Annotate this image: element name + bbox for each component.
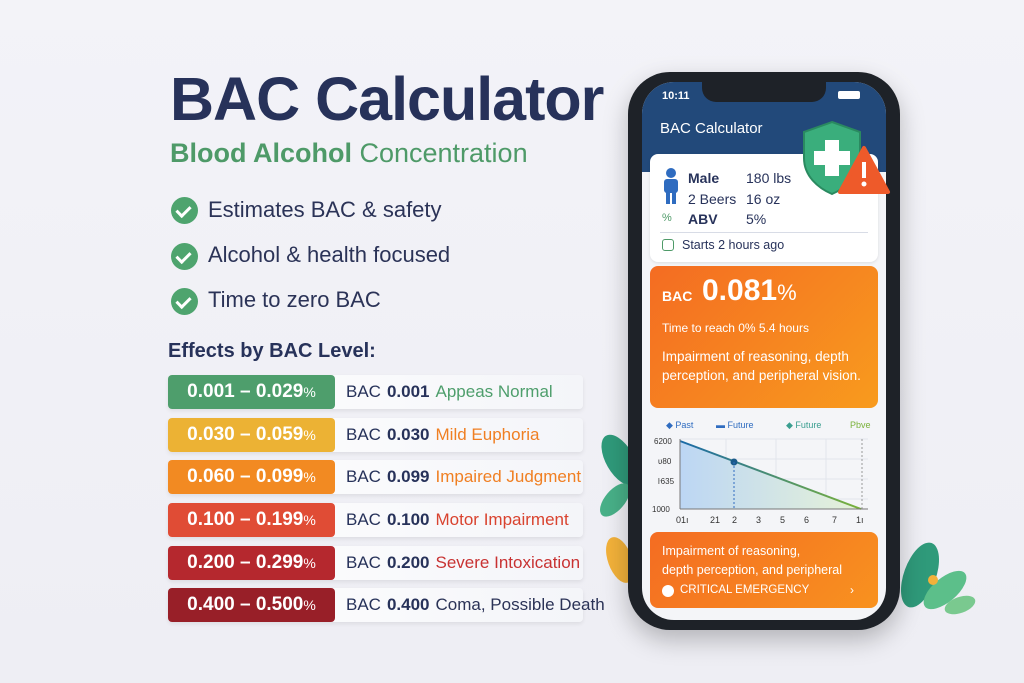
check 1 [171,197,198,224]
row 4: BAC 0.100 Motor Impairment [346,510,569,529]
row 1: 0.001 – 0.029% [187,381,316,402]
chart: ŀ635 [658,477,675,486]
row 6: BAC 0.400 Coma, Possible Death [346,595,605,614]
chart: ʋ80 [658,457,672,466]
row 3 [168,460,583,494]
row 2: BAC 0.030 Mild Euphoria [346,425,539,444]
chart: 01ı [676,515,689,525]
inputs card: 2 Beers [688,191,736,207]
row 1: BAC 0.001 Appeas Normal [346,382,553,401]
row 5: BAC 0.200 Severe Intoxication [346,553,580,572]
leaves decoration [600,434,976,614]
emergency card: › [850,583,854,597]
notch [702,82,826,102]
status bar: 10:11 [662,90,690,102]
chart: 1ı [856,515,864,525]
emergency card: CRITICAL EMERGENCY [680,584,809,596]
BAC result card [650,266,878,408]
inputs card: 16 oz [746,191,780,207]
check 3 [171,288,198,315]
BAC result card: Impairment of reasoning, depth perception, and peripheral vision. [662,349,861,383]
chart: 7 [832,515,837,525]
inputs card: Male [688,170,719,186]
inputs card [650,154,878,262]
inputs card: Starts 2 hours ago [682,238,784,252]
emergency card: Impairment of reasoning, [662,544,800,558]
row 6 [168,588,583,622]
icon: shield with warning [803,121,890,196]
row 1 [168,375,583,409]
phone [628,72,900,630]
check 2 [171,243,198,270]
inputs card: % [662,212,672,224]
chart: 2 [732,515,737,525]
BAC result card: BAC [662,288,692,304]
chart: 5 [780,515,785,525]
chart: 6200 [654,437,672,446]
chart: Pbve [850,420,871,430]
chart: ◆ Past [666,420,694,430]
inputs card: 180 lbs [746,170,791,186]
feature list: Time to zero BAC [208,287,381,312]
chart: ▬ Future [716,420,754,430]
feature list [171,197,450,315]
effects heading: Effects by BAC Level: [168,340,376,362]
chart [652,420,871,525]
row 5: 0.200 – 0.299% [187,552,316,573]
chart: ◆ Future [786,420,821,430]
feature list: Estimates BAC & safety [208,197,442,222]
screen [642,82,886,620]
person icon [664,168,678,204]
BAC result card: Time to reach 0% 5.4 hours [662,321,809,335]
row 4: 0.100 – 0.199% [187,509,316,530]
row 5 [168,546,583,580]
effects table [168,375,605,624]
row 6: 0.400 – 0.500% [187,594,316,615]
feature list: Alcohol & health focused [208,242,450,267]
inputs card: 5% [746,211,766,227]
chart: 1000 [652,505,670,514]
row 3: 0.060 – 0.099% [187,466,316,487]
app title: BAC Calculator [660,120,763,137]
inputs card: ABV [688,211,718,227]
BAC result card: 0.081% [702,274,797,307]
emergency card: depth perception, and peripheral [662,563,842,577]
chart: 3 [756,515,761,525]
title: BAC Calculator [170,65,603,133]
app header [642,82,886,172]
row 2: 0.030 – 0.059% [187,424,316,445]
subtitle: Blood Alcohol Concentration [170,138,528,168]
chart: 6 [804,515,809,525]
chart: 21 [710,515,720,525]
emergency card [650,532,878,608]
row 2 [168,418,583,452]
row 3: BAC 0.099 Impaired Judgment [346,467,581,486]
row 4 [168,503,583,537]
